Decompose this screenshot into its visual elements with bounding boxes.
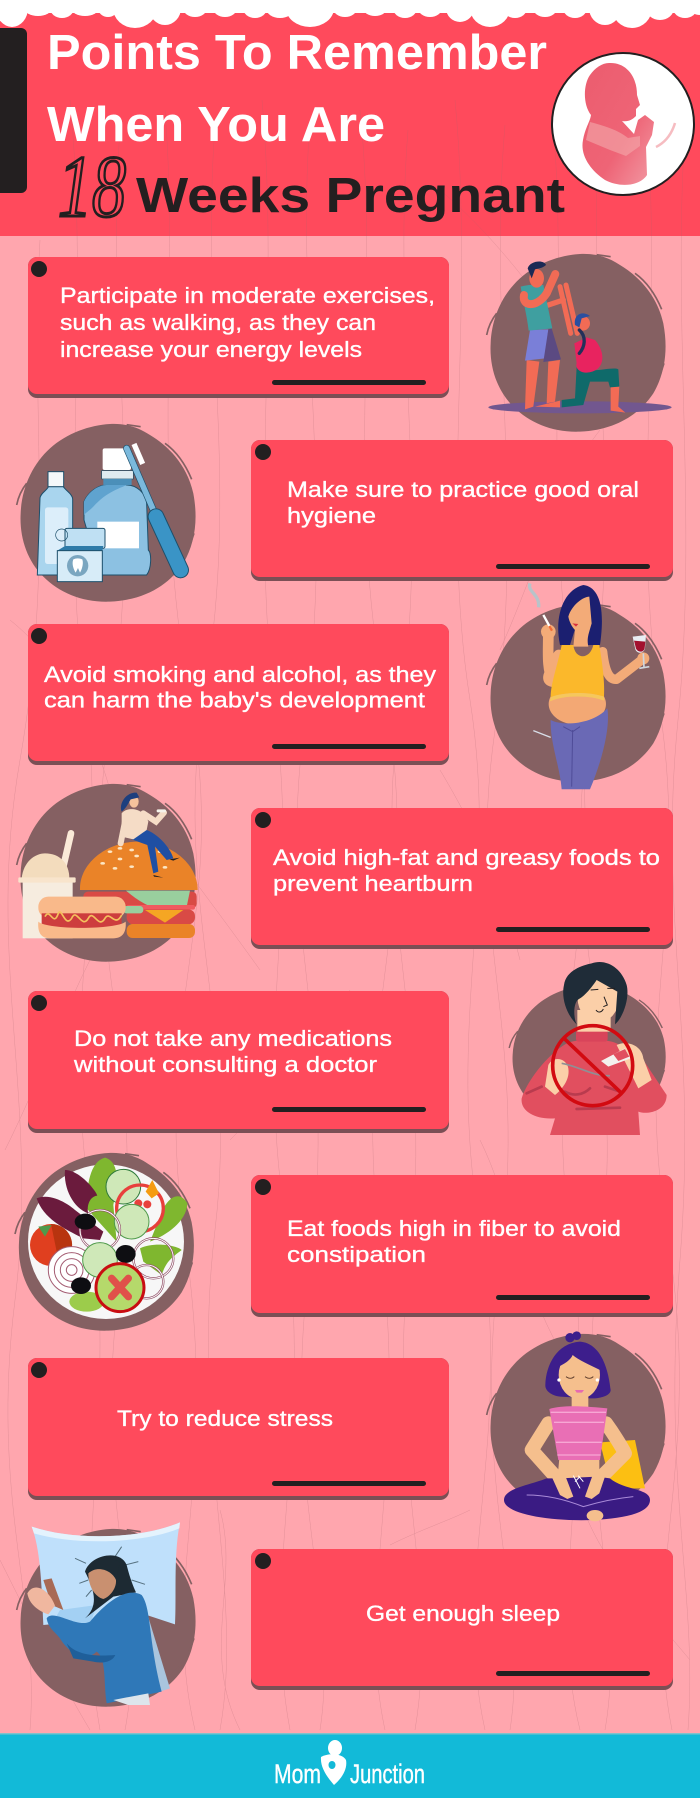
card 6: fiber foods: Eat foods high in fiber to avoid: [287, 1216, 621, 1241]
card 4: high-fat foods: Avoid high-fat and greasy foods to: [273, 845, 660, 870]
illustration: oral care products: [17, 424, 196, 602]
card 7: reduce stress: [28, 1358, 449, 1500]
card 1: exercise: increase your energy levels: [60, 337, 362, 362]
card 2: oral hygiene: hygiene: [287, 503, 376, 528]
logo: Junction: [350, 1759, 425, 1789]
illustration: junk food with woman on burger: [17, 784, 198, 962]
card 1: exercise: [28, 257, 449, 398]
card 5: medications: [28, 991, 449, 1133]
card 1: exercise: such as walking, as they can: [60, 310, 376, 335]
card 2: oral hygiene: [251, 440, 673, 581]
card 3: smoking and alcohol: [28, 624, 449, 765]
illustration: woman smoking and drinking: [487, 583, 666, 789]
card 3: smoking and alcohol: can harm the baby's development: [44, 688, 426, 712]
illustration: woman sleeping on pillow: [17, 1522, 196, 1707]
card 5: medications: Do not take any medications: [74, 1026, 392, 1051]
left black tab: [0, 28, 27, 193]
logo: Mom: [274, 1759, 321, 1789]
card 2: oral hygiene: Make sure to practice good oral: [287, 477, 639, 502]
icon: fetus in circle: [552, 53, 694, 195]
card 7: reduce stress: Try to reduce stress: [117, 1406, 333, 1431]
card 4: high-fat foods: [251, 808, 673, 949]
title: Weeks Pregnant: [136, 169, 565, 223]
card 8: sleep: [251, 1549, 673, 1690]
title: 18: [58, 139, 126, 236]
card 6: fiber foods: [251, 1175, 673, 1317]
footer band: [0, 1733, 700, 1798]
title: [47, 26, 565, 236]
card 4: high-fat foods: prevent heartburn: [273, 871, 473, 896]
card 5: medications: without consulting a doctor: [73, 1052, 378, 1077]
title: Points To Remember: [47, 26, 547, 80]
card 6: fiber foods: constipation: [287, 1242, 426, 1267]
logo: [274, 1740, 425, 1789]
card 3: smoking and alcohol: Avoid smoking and alcohol, as they: [44, 662, 437, 687]
illustration: meditating woman: [487, 1331, 666, 1521]
illustration: salad plate: [15, 1153, 194, 1331]
illustration: couple exercising: [487, 254, 672, 432]
title: When You Are: [47, 98, 385, 152]
card 8: sleep: Get enough sleep: [366, 1601, 560, 1626]
illustration: woman with crossed-out medicine: [509, 962, 667, 1135]
card 1: exercise: Participate in moderate exercises,: [60, 283, 435, 308]
header band: [0, 0, 700, 236]
